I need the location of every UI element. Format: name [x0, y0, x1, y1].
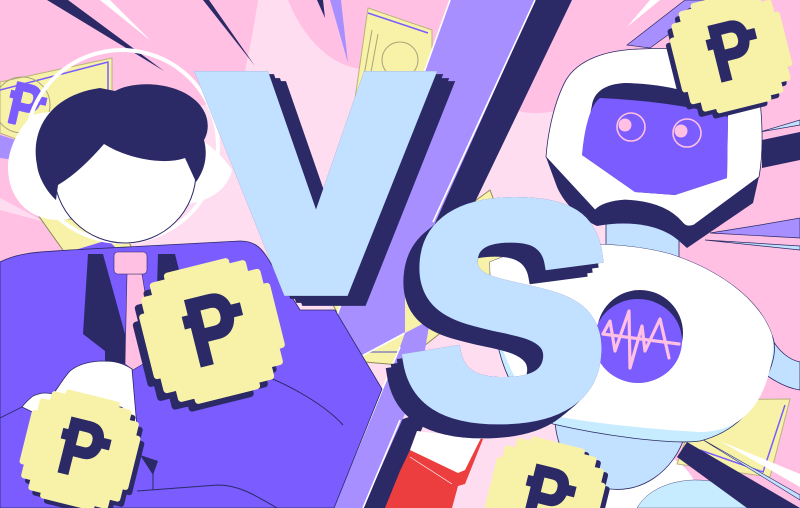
letter V: V: [215, 22, 430, 351]
robot head: [546, 48, 762, 248]
bill: top centre: [352, 8, 432, 130]
waveform: [603, 311, 679, 368]
suit seams: [137, 374, 343, 508]
bill: upper left: [0, 58, 112, 160]
face screen: [582, 83, 728, 195]
coin: large centre: P: [176, 271, 250, 387]
bill currency mark: P: [2, 70, 47, 141]
coin: lower left: P: [51, 401, 112, 498]
letter S: S: [388, 149, 615, 483]
coin: top right: [661, 0, 797, 122]
coin: lower left: [15, 386, 149, 508]
tie knot: [114, 252, 147, 274]
letter S: S: [382, 154, 609, 488]
lapel right: [157, 254, 180, 287]
letter V: V: [209, 19, 424, 348]
coin: top right: P: [701, 3, 763, 99]
lightning slash: [313, 0, 572, 508]
robot body: [490, 244, 775, 442]
letter S: S: [393, 144, 620, 478]
speed rays: [0, 0, 800, 250]
bill: lower right: [677, 399, 790, 477]
red suit: [385, 431, 483, 508]
lower-right navy ray: [677, 438, 800, 508]
robot arm: [762, 335, 800, 390]
letter V: V: [227, 29, 442, 358]
tie: [125, 274, 148, 370]
chest screen: [597, 290, 683, 376]
letter V: V: [209, 19, 424, 348]
letter V: V: [221, 26, 436, 355]
robot lower base: [555, 420, 753, 508]
hair: [36, 84, 208, 200]
suit body: [0, 241, 382, 508]
hair backdrop: [8, 110, 232, 220]
eye left: [617, 113, 645, 141]
bill: lower left behind head: [38, 215, 136, 260]
eye right: [673, 119, 701, 147]
coin: bottom: [480, 433, 614, 508]
man: [0, 50, 382, 508]
bill: middle, behind lightning: [333, 190, 520, 365]
letter S: S: [393, 144, 620, 478]
halo: [26, 50, 218, 242]
robot neck: [606, 215, 679, 258]
sleeve: [22, 361, 138, 439]
lapel left: [83, 254, 125, 364]
face: [54, 101, 196, 243]
coin: large centre: [127, 253, 291, 416]
letter S: S: [377, 158, 604, 492]
